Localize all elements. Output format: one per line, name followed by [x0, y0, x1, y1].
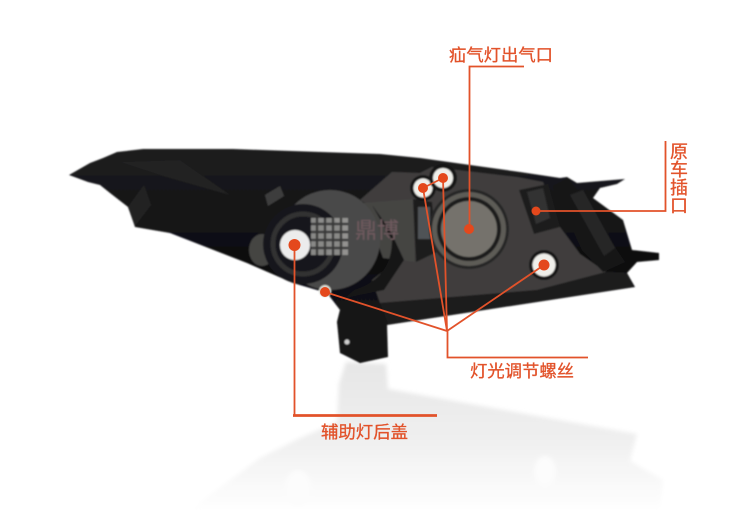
- headlamp rear housing: [69, 149, 659, 363]
- callout: xenon lamp outlet: [449, 46, 553, 234]
- floor reflection of headlamp: [187, 362, 663, 512]
- callout: auxiliary lamp rear cover: 辅助灯后盖: [321, 423, 408, 442]
- callout: original car socket: 口: [670, 196, 688, 216]
- auxiliary lamp back ring: [249, 234, 275, 266]
- adjustment screw collars: [410, 175, 436, 201]
- callout: original car socket: 插: [670, 178, 688, 198]
- callout: light adjustment screws: 灯光调节螺丝: [470, 362, 574, 381]
- QR sticker: [311, 218, 348, 255]
- xenon lamp cover: [429, 189, 509, 269]
- callout: original car socket: [532, 141, 688, 216]
- callout: light adjustment screws: [320, 173, 588, 381]
- callout: xenon lamp outlet: 疝气灯出气口: [449, 46, 553, 65]
- callout: auxiliary lamp rear cover: [288, 239, 437, 442]
- central grey body: [360, 167, 606, 303]
- module box: [363, 199, 415, 262]
- connector socket: [519, 184, 560, 234]
- left shell highlights: [128, 185, 151, 226]
- cap label: [280, 230, 310, 260]
- watermark: 鼎博: [355, 218, 399, 243]
- auxiliary lamp drum: [280, 190, 380, 290]
- callout: original car socket: 原: [670, 142, 688, 162]
- lower mount bracket: [337, 310, 387, 363]
- right connector bracket: [553, 178, 625, 272]
- callout: original car socket: 车: [670, 160, 688, 180]
- outer black shell: [69, 149, 659, 363]
